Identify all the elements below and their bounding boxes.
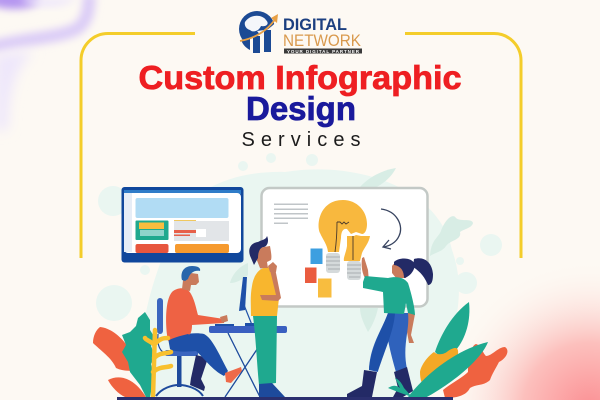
head <box>182 272 199 291</box>
trousers <box>369 313 408 372</box>
whiteboard panel <box>262 188 428 306</box>
head <box>392 261 410 278</box>
background: pale green blobs <box>96 153 502 398</box>
back leg and boot <box>190 355 208 391</box>
torso <box>166 288 224 341</box>
title <box>138 60 462 151</box>
table top <box>209 326 287 333</box>
ponytail <box>413 258 433 285</box>
logo: globe <box>239 11 278 53</box>
table legs <box>225 333 268 397</box>
standing man <box>249 236 285 397</box>
background: faded leaves <box>230 168 473 332</box>
seated man <box>156 266 242 396</box>
logo: NETWORK <box>283 32 361 50</box>
whiteboard: sticky notes <box>305 248 332 298</box>
teal leaf <box>408 342 488 398</box>
boots <box>347 370 377 397</box>
head <box>256 246 271 268</box>
red leaf <box>443 344 507 398</box>
plant: right leaves <box>388 302 507 398</box>
whiteboard: curved arrow <box>381 209 401 249</box>
trousers <box>253 316 277 385</box>
title: Design <box>246 91 356 128</box>
logo: tagline: YOUR DIGITAL PARTNER <box>287 49 360 54</box>
hand <box>220 315 228 323</box>
arms <box>362 257 369 282</box>
shoes <box>259 383 285 397</box>
trousers <box>168 333 228 376</box>
desk with monitor <box>209 277 287 397</box>
title: Services <box>242 129 360 151</box>
title: Custom Infographic <box>138 60 462 97</box>
small leaf <box>388 378 412 397</box>
desktop screen <box>239 277 247 311</box>
monitor panel <box>122 187 244 262</box>
hair <box>249 236 268 265</box>
shoe <box>225 367 242 383</box>
background: purple swirl <box>0 0 90 130</box>
arms <box>260 268 281 301</box>
orange leaf <box>420 348 458 390</box>
ground line <box>117 397 453 400</box>
lightbulb icon <box>319 200 370 280</box>
logo: wordmark: DIGITAL <box>283 15 347 34</box>
chair <box>156 298 203 396</box>
shirt <box>363 276 415 315</box>
whiteboard: text lines <box>274 204 308 224</box>
tall teal leaf <box>435 302 469 360</box>
logo <box>239 11 362 54</box>
background: pink glow <box>420 250 600 400</box>
plant: left leaves <box>93 312 171 397</box>
yellow frame <box>81 34 521 258</box>
hand <box>268 262 277 272</box>
standing woman <box>347 257 433 397</box>
shirt <box>251 267 279 316</box>
